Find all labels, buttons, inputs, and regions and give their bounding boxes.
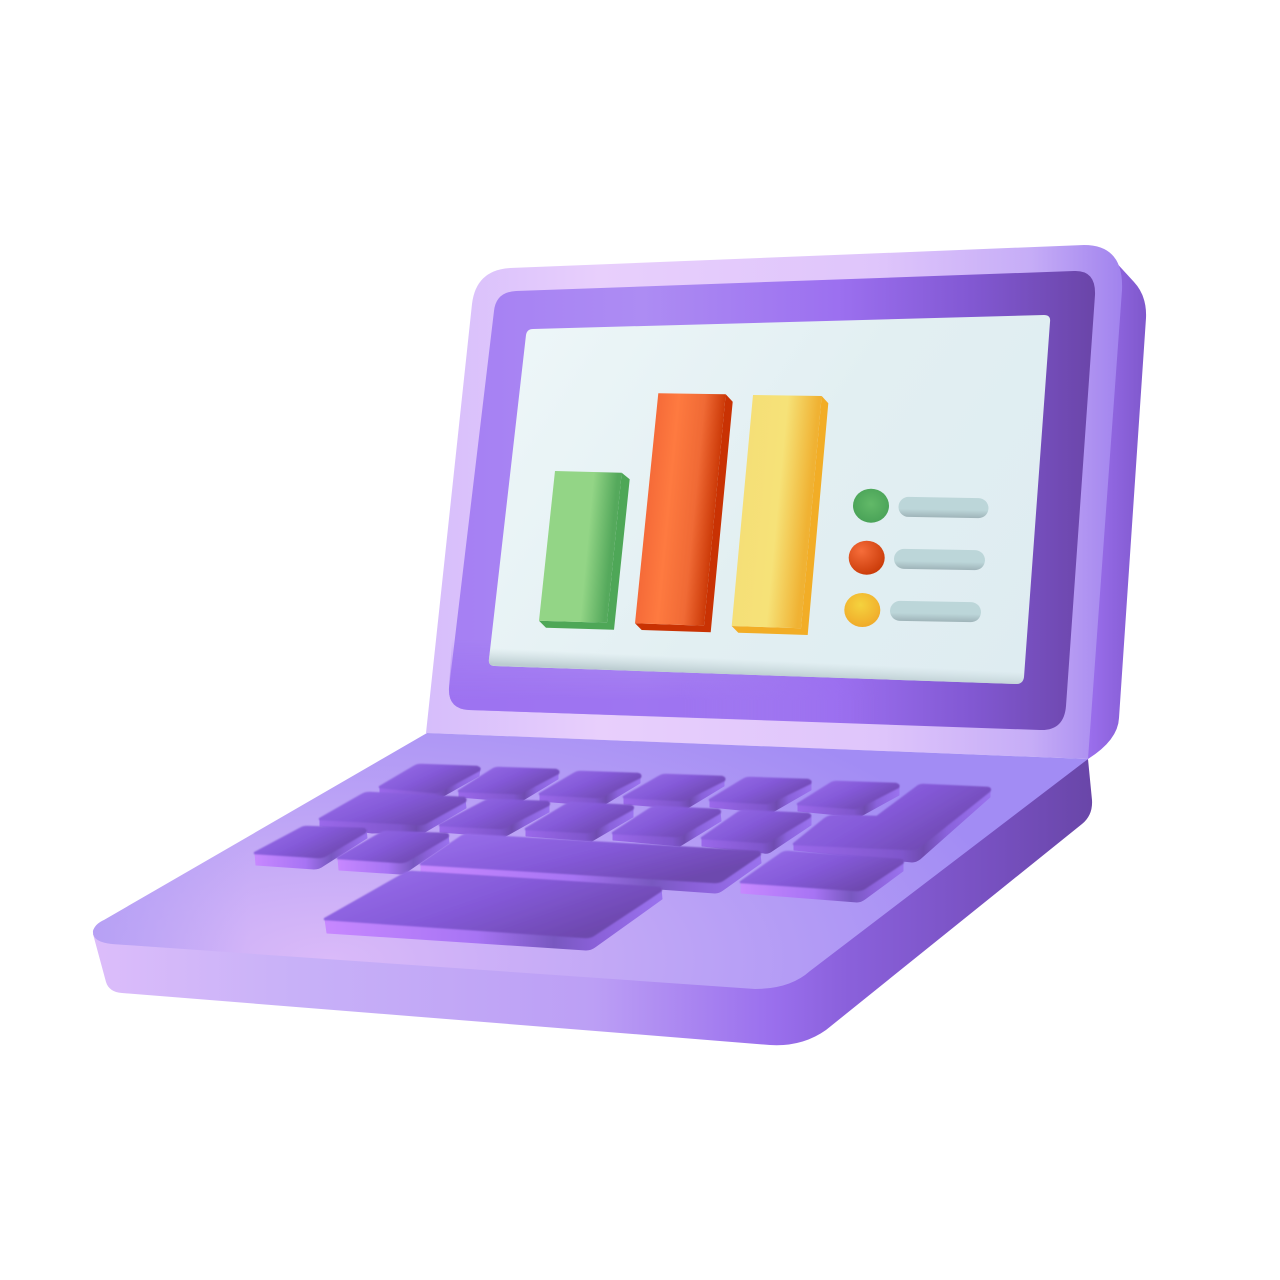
lid frame	[426, 245, 1122, 759]
laptop lid	[426, 245, 1146, 759]
enter key	[794, 785, 990, 862]
legend: yellow row	[844, 593, 981, 627]
key 11	[702, 811, 811, 853]
key 6	[798, 782, 899, 817]
base side walls	[93, 759, 1092, 1045]
key 2	[459, 768, 558, 802]
spacebar	[421, 835, 761, 893]
key wide left	[320, 793, 466, 833]
key 9	[526, 803, 633, 841]
key 14	[338, 832, 449, 874]
yellow bar	[732, 395, 828, 635]
illustration: laptop showing bar chart	[92, 245, 1146, 1046]
key 5	[710, 778, 811, 813]
key row 2	[320, 785, 990, 862]
red bar	[635, 393, 733, 632]
key 13	[255, 827, 367, 869]
base top deck	[93, 733, 1088, 989]
key row 1	[380, 765, 899, 817]
legend: green row	[853, 489, 989, 523]
key 8	[440, 800, 549, 837]
screen display	[489, 315, 1050, 684]
laptop base	[93, 733, 1092, 1045]
legend: red row	[849, 541, 985, 575]
key row 3	[255, 827, 903, 902]
key 4	[624, 775, 724, 809]
key 3	[540, 772, 640, 806]
key 10	[613, 807, 721, 846]
keyboard	[255, 765, 990, 950]
touchpad	[325, 872, 662, 950]
green bar	[539, 471, 630, 630]
key 1	[380, 765, 480, 798]
screen bezel	[449, 271, 1095, 730]
lid rear edge	[1060, 258, 1146, 759]
arrow key	[741, 852, 903, 902]
